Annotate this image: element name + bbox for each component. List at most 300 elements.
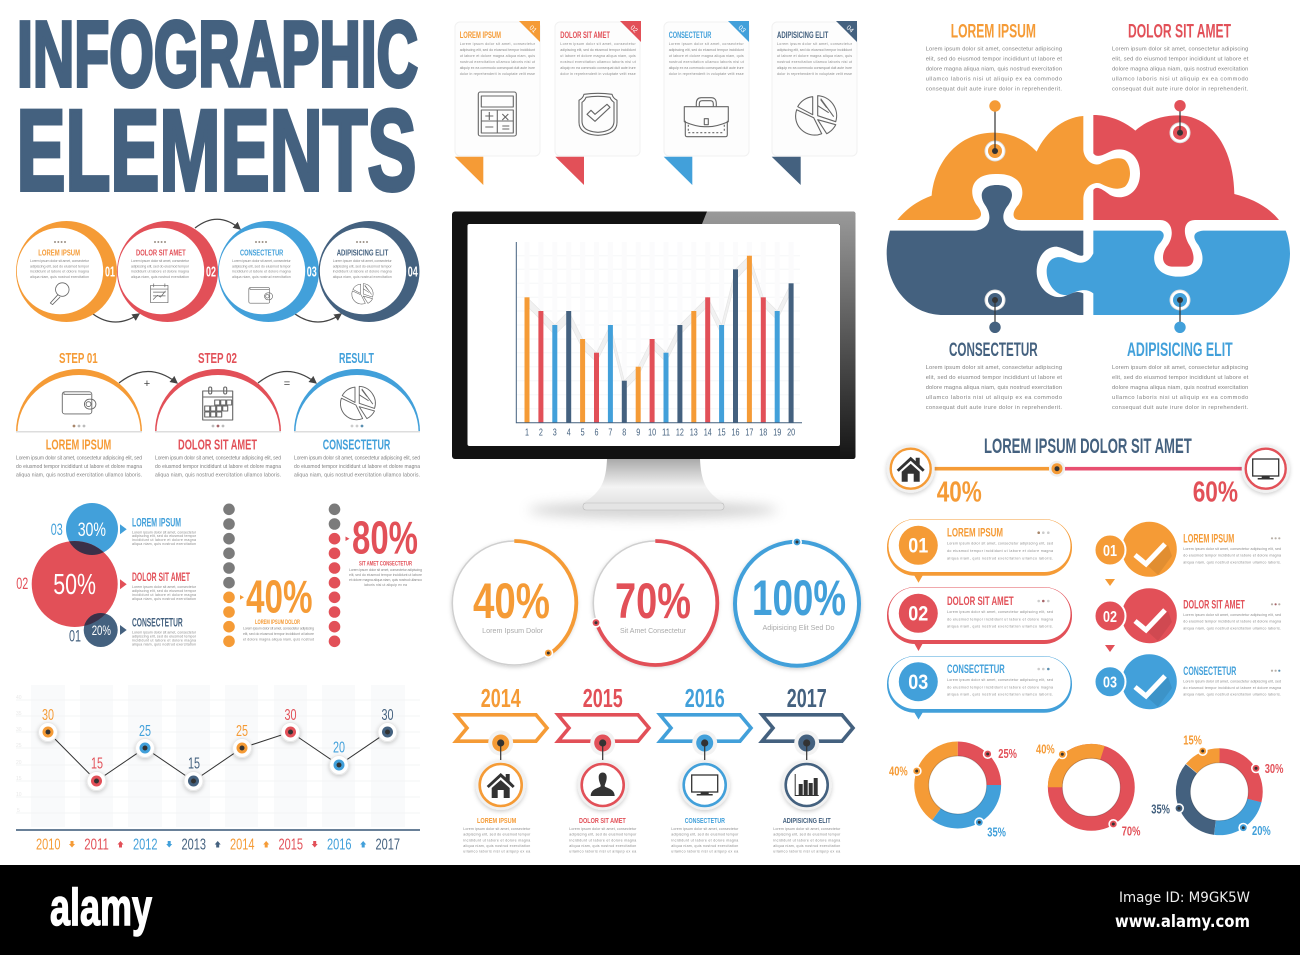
block adipisicing elit: Lorem ipsum dolor sit amet, consectetur adipiscing — [1112, 365, 1248, 371]
panel: line chart — [16, 685, 420, 854]
step arrows: = — [284, 378, 290, 390]
block adipisicing elit — [1112, 339, 1249, 411]
bubble legend 1: adipiscing elit, sed do eiusmod tempor — [132, 534, 197, 538]
panel: 40% dot column — [223, 504, 314, 647]
timeline 2015: adipiscing elit, sed do eiusmod tempor — [569, 833, 637, 837]
item 03: aliqua niam, quis nostrud exercitation ullamco laboris. — [1183, 693, 1281, 697]
circle 03: CONSECTETUR — [240, 248, 284, 258]
caption: laboris nisi ut aliquip ex ea — [364, 583, 407, 587]
connector lorem ipsum — [985, 100, 1005, 161]
item 01: 01 — [1103, 543, 1117, 560]
pill 03: aliqua niam, quis nostrud exercitation ullamco laboris. — [947, 693, 1053, 697]
gauge 70% — [591, 541, 717, 665]
y ticks — [16, 695, 22, 814]
panel: circular gauges — [452, 537, 859, 666]
timeline 2014: ullamco laboris nisi ut aliquip ex ea — [463, 850, 530, 854]
year arrows — [69, 841, 366, 848]
circle 04: ADIPISICING ELIT — [337, 248, 389, 258]
pill 03: CONSECTETUR — [947, 662, 1005, 676]
card 01: LOREM IPSUM — [460, 30, 501, 40]
x labels: 5 — [581, 426, 585, 438]
circle 04: incididunt ut labore et dolore magna — [333, 270, 392, 274]
years: 2016 — [327, 836, 352, 854]
timeline 2014 — [456, 683, 547, 854]
bubble legend 3: aliqua niam, quis nostrud exercitation — [132, 642, 196, 646]
circle 02: aliqua niam, quis nostrud exercitation — [131, 275, 189, 279]
item 01: do eiusmod tempor incididunt ut labore et dolore magna — [1183, 554, 1281, 558]
monitor screen — [468, 224, 840, 446]
circle 03: incididunt ut labore et dolore magna — [232, 270, 291, 274]
x axis — [16, 829, 420, 831]
block lorem ipsum: ullamco laboris nisi ut aliquip ex ea commodo — [926, 76, 1062, 82]
donut 2 — [1036, 742, 1141, 838]
pill 02 — [887, 587, 1072, 651]
step arrows — [119, 372, 316, 390]
card 03: 03 — [737, 24, 747, 35]
donut 3 — [1151, 732, 1284, 843]
card 01: dolor in reprehenderit in voluptate velit esse — [460, 72, 535, 76]
circle 03: aliqua niam, quis nostrud exercitation — [232, 275, 291, 279]
item 03: 03 — [1103, 675, 1117, 692]
card 04: dolor in reprehenderit in voluptate velit esse — [777, 72, 852, 76]
caption: LOREM IPSUM DOLOR — [255, 619, 300, 626]
step 01 — [16, 350, 142, 479]
value — [346, 512, 418, 564]
bubble values: 20% — [92, 622, 111, 638]
x labels: 3 — [553, 426, 557, 438]
card 04: ADIPISICING ELIT — [777, 30, 829, 40]
timeline 2017: aliqua niam, quis nostrud exercitation — [773, 844, 840, 848]
gauge 40% — [452, 541, 576, 665]
bubble 50%: 02 — [16, 574, 28, 593]
title: ELEMENTS — [16, 87, 416, 215]
timeline 2015: 2015 — [583, 683, 623, 713]
item 02: DOLOR SIT AMET — [1183, 598, 1245, 612]
timeline 2016: Lorem ipsum dolor sit amet, consectetur — [671, 827, 739, 831]
pill 01: Lorem ipsum dolor sit amet, consectetur adipiscing elit, sed — [947, 542, 1053, 546]
gauge 100%: 100% — [752, 570, 846, 626]
card 02: DOLOR SIT AMET — [560, 30, 610, 40]
card 03: dolor in reprehenderit in voluptate velit esse — [669, 72, 744, 76]
pill 02: Lorem ipsum dolor sit amet, consectetur adipiscing elit, sed — [947, 610, 1053, 614]
donut 1: 25% — [998, 746, 1017, 761]
circle 02 — [117, 221, 218, 322]
timeline 2014: adipiscing elit, sed do eiusmod tempor — [463, 833, 531, 837]
timeline 2014: 2014 — [481, 683, 521, 713]
card 02: nostrud exercitation ullamco laboris nisi ut — [560, 60, 636, 64]
card 03: adipiscing elit, sed do eiusmod tempor incididunt — [669, 48, 744, 52]
caption — [243, 619, 314, 642]
timeline 2017: ADIPISICING ELIT — [783, 816, 831, 825]
card 02: adipiscing elit, sed do eiusmod tempor incididunt — [560, 48, 636, 52]
x labels: 16 — [732, 426, 740, 438]
timeline 2014: Lorem ipsum dolor sit amet, consectetur — [463, 827, 531, 831]
value 40%: 40% — [937, 476, 982, 508]
donut 1: 35% — [987, 824, 1006, 840]
circle 02: DOLOR SIT AMET — [136, 248, 186, 258]
item 02 — [1094, 588, 1281, 643]
pill 01: aliqua niam, quis nostrud exercitation ullamco laboris. — [947, 556, 1053, 560]
caption: elit, sed do eiusmod tempor incididunt ut labore — [349, 573, 422, 577]
years: 2014 — [230, 836, 255, 854]
block dolor sit amet: elit, sed do eiusmod tempor incididunt ut labore et — [1112, 56, 1249, 62]
timeline 2016: ullamco laboris nisi ut aliquip ex ea — [671, 850, 738, 854]
item 01: Lorem ipsum dolor sit amet, consectetur adipiscing elit, sed — [1183, 547, 1281, 551]
title: INFOGRAPHIC — [17, 2, 418, 106]
circle 01: Lorem ipsum dolor sit amet, consectetur — [30, 259, 90, 263]
chart grid — [516, 242, 800, 422]
bubble legend 1: LOREM IPSUM — [132, 517, 181, 529]
bubble legend 2: Lorem ipsum dolor sit amet, consectetur — [132, 585, 197, 589]
donut 1: 40% — [889, 764, 908, 778]
bubble values: 30% — [78, 520, 106, 541]
y ticks: 25 — [16, 743, 22, 749]
circle 03: Lorem ipsum dolor sit amet, consectetur — [232, 259, 291, 263]
title — [16, 2, 418, 215]
block consectetur: consequat duit aute irure dolor in reprehenderit. — [926, 405, 1062, 411]
connector consectetur — [985, 290, 1005, 333]
circle 04: adipiscing elit, sed do eiusmod tempor — [333, 264, 392, 268]
bar chart — [516, 242, 802, 438]
donut 2: 70% — [1122, 824, 1141, 838]
data points: 25 — [236, 723, 248, 740]
timeline 2017: adipiscing elit, sed do eiusmod tempor — [773, 833, 841, 837]
icon: pie — [796, 96, 837, 135]
card 01 — [455, 21, 540, 185]
monitor stand — [583, 459, 724, 510]
pill 03: 03 — [908, 671, 928, 694]
years: 2011 — [84, 836, 109, 854]
circle 01 — [16, 221, 117, 322]
icon: calculator — [478, 92, 516, 136]
line series — [48, 732, 388, 781]
step 01: Lorem ipsum dolor sit amet, consectetur adipiscing elit, sed — [16, 456, 142, 462]
data points — [38, 707, 397, 790]
block consectetur — [926, 339, 1062, 411]
pill 02: 02 — [908, 602, 928, 626]
data points: 30 — [42, 707, 54, 724]
circle 01: 01 — [105, 264, 115, 280]
step arrows: + — [144, 378, 150, 390]
x labels: 6 — [594, 426, 599, 438]
monitor base — [583, 503, 724, 510]
item 02: 02 — [1103, 609, 1117, 626]
icon: home — [887, 445, 935, 493]
pill 01: do eiusmod tempor incididunt ut labore et dolore magna — [947, 549, 1053, 553]
step 01: aliqua niam, quis nostrud exercitation ullamco laboris. — [16, 473, 142, 479]
y ticks: 5 — [17, 808, 20, 814]
pill 01: LOREM IPSUM — [947, 526, 1003, 540]
step 01: do eiusmod tempor incididunt ut labore et dolore magna — [16, 464, 142, 470]
card 02: ut labore et dolore magna aliqua niam, quis — [560, 54, 636, 58]
x labels: 20 — [787, 426, 795, 438]
bubble legend 2: aliqua niam, quis nostrud exercitation — [132, 597, 196, 601]
block dolor sit amet: DOLOR SIT AMET — [1128, 20, 1231, 42]
block lorem ipsum: elit, sed do eiusmod tempor incididunt ut labore et — [926, 56, 1062, 62]
timeline 2016: 2016 — [685, 683, 725, 713]
card 04: ut labore et dolore magna aliqua niam, quis — [777, 54, 852, 58]
timeline 2017: 2017 — [787, 683, 827, 713]
bubble legend 3: Lorem ipsum dolor sit amet, consectetur — [132, 630, 197, 634]
data points: 30 — [382, 707, 394, 724]
x labels: 19 — [773, 426, 781, 438]
gauge 100%: Adipisicing Elit Sed Do — [762, 625, 835, 632]
timeline 2014: incididunt ut labore et dolore magna — [463, 838, 530, 842]
card 01: Lorem ipsum dolor sit amet, consectetur — [460, 42, 536, 46]
timeline 2015: incididunt ut labore et dolore magna — [569, 838, 636, 842]
bubble legend 2: DOLOR SIT AMET — [132, 572, 190, 584]
timeline 2015: aliqua niam, quis nostrud exercitation — [569, 844, 636, 848]
timeline 2016 — [660, 683, 751, 854]
timeline 2015: Lorem ipsum dolor sit amet, consectetur — [569, 827, 637, 831]
card 01: ut labore et dolore magna aliqua niam, quis — [460, 54, 535, 58]
item 03: CONSECTETUR — [1183, 664, 1236, 678]
value — [240, 571, 312, 623]
circle 01: aliqua niam, quis nostrud exercitation — [30, 275, 89, 279]
bubble 30% — [51, 503, 118, 555]
bubble 50% — [16, 541, 118, 627]
dots — [329, 504, 340, 647]
bubble legend 3 — [120, 617, 197, 646]
card 02: Lorem ipsum dolor sit amet, consectetur — [560, 42, 636, 46]
panel: option cards — [455, 21, 857, 185]
bubble values — [53, 520, 111, 638]
value: 80% — [352, 512, 418, 564]
data points: 20 — [333, 740, 345, 756]
circle 04: Lorem ipsum dolor sit amet, consectetur — [333, 259, 392, 263]
cloud pieces — [887, 115, 1290, 315]
connector adipisicing elit — [1170, 290, 1190, 333]
chart axes — [516, 242, 802, 423]
circle 03: adipiscing elit, sed do eiusmod tempor — [232, 264, 291, 268]
panel: check list — [1094, 522, 1281, 709]
data points: 30 — [284, 707, 297, 724]
timeline 2015 — [558, 683, 649, 854]
y ticks: 40 — [16, 695, 22, 701]
caption: Lorem ipsum dolor sit amet, consectetur adipiscing — [349, 568, 422, 572]
card 01: adipiscing elit, sed do eiusmod tempor incididunt — [460, 48, 535, 52]
timeline 2015: DOLOR SIT AMET — [579, 816, 626, 825]
bubble legend 3: incididunt ut labore et dolore magna — [132, 638, 196, 642]
card 03 — [664, 21, 749, 185]
footer url: www.alamy.com — [1115, 912, 1250, 931]
block adipisicing elit: consequat duit aute irure dolor in reprehenderit. — [1112, 405, 1249, 411]
block consectetur: CONSECTETUR — [949, 339, 1038, 361]
block lorem ipsum: consequat duit aute irure dolor in reprehenderit. — [926, 86, 1062, 92]
x labels: 14 — [704, 426, 712, 438]
x labels: 10 — [648, 426, 656, 438]
circle 02: Lorem ipsum dolor sit amet, consectetur — [131, 259, 190, 263]
data points: 15 — [91, 756, 103, 772]
bubble legend 1: Lorem ipsum dolor sit amet, consectetur — [132, 530, 197, 534]
years: 2017 — [376, 836, 400, 854]
step result: RESULT — [339, 350, 374, 367]
bubble values: 50% — [53, 569, 96, 601]
card 04 — [772, 21, 857, 185]
x labels: 1 — [525, 426, 529, 438]
donut 3: 30% — [1265, 761, 1284, 776]
panel: monitor with bar chart — [452, 212, 856, 518]
donut 3: 35% — [1151, 802, 1170, 816]
panel: 40/60 comparison — [887, 435, 1290, 508]
item 02: aliqua niam, quis nostrud exercitation ullamco laboris. — [1183, 626, 1281, 630]
block consectetur: Lorem ipsum dolor sit amet, consectetur adipiscing — [926, 365, 1062, 371]
card 02: aliquip ex ea commodo consequat duit aute irure — [560, 66, 636, 70]
bubble overlaps — [69, 541, 106, 626]
card 03: CONSECTETUR — [669, 30, 712, 40]
block dolor sit amet: Lorem ipsum dolor sit amet, consectetur adipiscing — [1112, 46, 1248, 52]
icon: monitor — [1242, 445, 1290, 493]
timeline 2017: incididunt ut labore et dolore magna — [773, 838, 840, 842]
years: 2013 — [182, 836, 206, 854]
comparison bar — [934, 461, 1242, 477]
y ticks: 10 — [16, 792, 22, 798]
card 04: nostrud exercitation ullamco laboris nisi ut — [777, 60, 852, 64]
timeline 2017: Lorem ipsum dolor sit amet, consectetur — [773, 827, 841, 831]
x labels: 4 — [567, 426, 571, 438]
caption: SIT AMET CONSECTETUR — [359, 560, 412, 568]
step result: CONSECTETUR — [323, 436, 390, 454]
peak shadow — [527, 256, 791, 390]
block dolor sit amet: consequat duit aute irure dolor in reprehenderit. — [1112, 86, 1249, 92]
pill 03: Lorem ipsum dolor sit amet, consectetur adipiscing elit, sed — [947, 678, 1053, 682]
circle 01: incididunt ut labore et dolore magna — [30, 270, 89, 274]
block adipisicing elit: ADIPISICING ELIT — [1127, 339, 1233, 361]
card 04: Lorem ipsum dolor sit amet, consectetur — [777, 42, 853, 46]
x labels — [525, 426, 795, 438]
step 02 — [155, 350, 281, 479]
monitor bezel — [452, 212, 856, 459]
caption: et dolore magna aliqua niam, quis nostrud — [243, 638, 314, 642]
donut 2: 40% — [1036, 742, 1055, 756]
bubble 20%: 01 — [69, 626, 81, 646]
step 01: STEP 01 — [59, 350, 98, 367]
bubble legend 1 — [120, 517, 197, 546]
footer band — [0, 865, 1300, 955]
card 04: aliquip ex ea commodo consequat duit aute irure — [777, 66, 852, 70]
x labels: 11 — [662, 426, 670, 438]
timeline 2014: aliqua niam, quis nostrud exercitation — [463, 844, 530, 848]
card 02: 02 — [629, 24, 639, 35]
card 03: aliquip ex ea commodo consequat duit aute irure — [669, 66, 744, 70]
circle 03 — [218, 221, 319, 322]
block dolor sit amet — [1112, 20, 1249, 92]
x labels: 2 — [539, 426, 543, 438]
step 02: STEP 02 — [198, 350, 237, 367]
donut 1 — [889, 734, 1017, 840]
footer logo: alamy — [50, 879, 152, 937]
circle 03: 03 — [307, 264, 317, 280]
block adipisicing elit: elit, sed do eiusmod tempor incididunt ut labore et — [1112, 375, 1249, 381]
x labels: 9 — [636, 426, 640, 438]
circle 04 — [318, 221, 420, 322]
item 01: aliqua niam, quis nostrud exercitation ullamco laboris. — [1183, 560, 1281, 564]
bubble legend 1: aliqua niam, quis nostrud exercitation — [132, 542, 196, 546]
block dolor sit amet: ullamco laboris nisi ut aliquip ex ea commodo — [1112, 76, 1248, 82]
block lorem ipsum: LOREM IPSUM — [951, 20, 1036, 42]
panel: four overlapping circles — [16, 219, 420, 322]
bubble 20% — [69, 613, 118, 647]
item 03: Lorem ipsum dolor sit amet, consectetur adipiscing elit, sed — [1183, 679, 1281, 683]
block consectetur: ullamco laboris nisi ut aliquip ex ea commodo — [926, 395, 1062, 401]
timeline 2016: aliqua niam, quis nostrud exercitation — [671, 844, 738, 848]
years — [36, 836, 400, 854]
card 01: nostrud exercitation ullamco laboris nisi ut — [460, 60, 535, 64]
bars — [524, 256, 794, 423]
pill 03 — [887, 656, 1072, 720]
bubble legend 2: adipiscing elit, sed do eiusmod tempor — [132, 589, 197, 593]
panel: percentage bubbles — [16, 503, 197, 647]
donut 3: 15% — [1183, 732, 1202, 748]
gauge 100% — [735, 537, 859, 666]
block dolor sit amet: dolore magna aliqua niam, quis nostrud exercitation — [1112, 66, 1248, 72]
arrow — [1105, 579, 1115, 586]
x labels: 17 — [745, 426, 754, 438]
pill 01 — [887, 519, 1072, 583]
x labels: 18 — [759, 426, 767, 438]
bezel gloss — [702, 212, 856, 459]
item 03 — [1094, 654, 1281, 709]
block adipisicing elit: dolore magna aliqua niam, quis nostrud exercitation — [1112, 385, 1248, 391]
step 02: do eiusmod tempor incididunt ut labore et dolore magna — [155, 464, 281, 470]
caption: Lorem ipsum dolor sit amet, consectetur adipiscing — [243, 626, 314, 630]
x labels: 8 — [622, 426, 626, 438]
item 01: LOREM IPSUM — [1183, 532, 1234, 546]
timeline 2017: ullamco laboris nisi ut aliquip ex ea — [773, 850, 840, 854]
value 60%: 60% — [1193, 476, 1238, 508]
block lorem ipsum: Lorem ipsum dolor sit amet, consectetur adipiscing — [926, 46, 1062, 52]
timeline 2015: ullamco laboris nisi ut aliquip ex ea — [569, 850, 636, 854]
panel: 80% dot column — [329, 504, 422, 647]
chart grid — [16, 685, 420, 827]
bubble legend 2 — [120, 572, 197, 601]
icon: briefcase — [684, 98, 728, 137]
y ticks: 15 — [16, 776, 22, 782]
donut 3: 20% — [1252, 823, 1271, 838]
x labels: 15 — [718, 426, 726, 438]
bubble 30%: 03 — [51, 520, 63, 539]
timeline 2014: LOREM IPSUM — [477, 816, 516, 825]
block consectetur: elit, sed do eiusmod tempor incididunt ut labore et — [926, 375, 1062, 381]
circle 01: LOREM IPSUM — [38, 248, 80, 258]
step result — [294, 350, 420, 479]
years: 2012 — [133, 836, 158, 854]
panel: numbered pills — [887, 519, 1072, 720]
dots — [223, 504, 235, 647]
footer image id: Image ID: M9GK5W — [1119, 890, 1250, 906]
caption: et dolore magna aliqua niam, quis nostrud ullamco — [349, 578, 422, 582]
timeline 2016: incididunt ut labore et dolore magna — [671, 838, 738, 842]
step 02: Lorem ipsum dolor sit amet, consectetur adipiscing elit, sed — [155, 456, 281, 462]
arrow — [1105, 645, 1115, 652]
card 01: aliquip ex ea commodo consequat duit aute irure — [460, 66, 535, 70]
card 03: ut labore et dolore magna aliqua niam, quis — [669, 54, 744, 58]
panel: step process — [16, 350, 420, 479]
y ticks: 35 — [16, 711, 22, 717]
block adipisicing elit: ullamco laboris nisi ut aliquip ex ea commodo — [1112, 395, 1248, 401]
panel: donut charts — [889, 732, 1284, 843]
step 02: aliqua niam, quis nostrud exercitation ullamco laboris. — [155, 473, 281, 479]
data points: 15 — [188, 756, 200, 772]
block consectetur: dolore magna aliqua niam, quis nostrud exercitation — [926, 385, 1062, 391]
circle 02: adipiscing elit, sed do eiusmod tempor — [131, 264, 190, 268]
step 01: LOREM IPSUM — [46, 436, 111, 454]
icon: shield — [579, 93, 617, 135]
gauge 70%: Sit Amet Consectetur — [620, 628, 687, 635]
card 02: dolor in reprehenderit in voluptate velit esse — [560, 72, 636, 76]
block lorem ipsum: dolore magna aliqua niam, quis nostrud exercitation — [926, 66, 1062, 72]
gauge 40%: Lorem Ipsum Dolor — [482, 628, 544, 635]
